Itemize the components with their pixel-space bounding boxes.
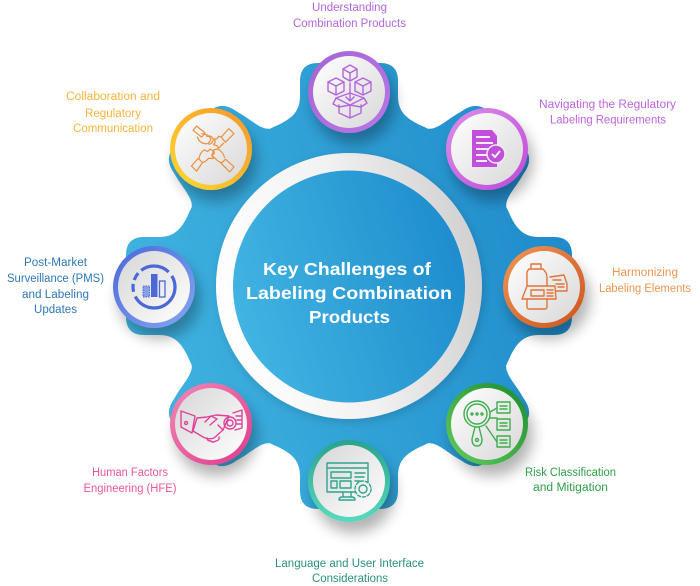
node: Post-Market Surveillance (PMS) and Labeling Updates	[113, 246, 195, 328]
label: Harmonizing Labeling Elements: Harmonizing	[612, 267, 678, 279]
node: Understanding Combination Products	[308, 51, 390, 133]
label: Risk Classification and Mitigation	[525, 467, 616, 494]
label: Language and User Interface Considerations	[275, 558, 424, 585]
icon: four hands with puzzle pieces	[191, 126, 234, 172]
icon: human and robot handshake	[181, 410, 242, 442]
node: Collaboration and Regulatory Communication	[170, 108, 252, 190]
label: Human Factors Engineering (HFE)	[84, 467, 177, 495]
icon: document with check	[472, 130, 505, 167]
label: Collaboration and Regulatory Communication: Communication	[73, 123, 153, 135]
label: Collaboration and Regulatory Communication: Collaboration and	[66, 91, 160, 103]
label: Understanding Combination Products: Combination Products	[293, 18, 406, 30]
title: Key Challenges of Labeling Combination Products: Labeling Combination	[246, 283, 452, 303]
icon: boxes	[328, 65, 371, 118]
icon: bottle and label	[522, 264, 567, 309]
label: Human Factors Engineering (HFE): Engineering (HFE)	[84, 483, 177, 495]
label: Navigating the Regulatory Labeling Requirements: Labeling Requirements	[550, 114, 666, 126]
label: Post-Market Surveillance (PMS) and Labeling Updates: Surveillance (PMS)	[7, 273, 104, 285]
label: Language and User Interface Considerations: Language and User Interface	[275, 558, 424, 570]
label: Understanding Combination Products: Understanding	[312, 2, 387, 14]
node: Navigating the Regulatory Labeling Requirements	[446, 108, 528, 190]
label: Harmonizing Labeling Elements	[599, 267, 691, 295]
blue gear background	[126, 63, 572, 509]
icon: bar chart in broken ring	[133, 266, 175, 308]
label: Collaboration and Regulatory Communication: Regulatory	[85, 108, 141, 120]
label: Harmonizing Labeling Elements: Labeling Elements	[599, 283, 691, 295]
node: Harmonizing Labeling Elements	[503, 246, 585, 328]
icon: screen and gear	[327, 463, 371, 500]
node: Human Factors Engineering (HFE)	[170, 383, 252, 465]
center white ring	[216, 153, 482, 419]
label: Risk Classification and Mitigation: and Mitigation	[533, 482, 608, 494]
label: Language and User Interface Considerations: Considerations	[312, 573, 388, 585]
label: Post-Market Surveillance (PMS) and Labeling Updates	[7, 257, 104, 316]
center blue disc	[233, 170, 465, 402]
label: Post-Market Surveillance (PMS) and Labeling Updates: Updates	[34, 304, 77, 316]
label: Navigating the Regulatory Labeling Requirements	[539, 99, 676, 126]
icon: magnifier and lists	[464, 401, 510, 447]
label: Post-Market Surveillance (PMS) and Labeling Updates: Post-Market	[24, 257, 88, 269]
center circle with title	[216, 153, 482, 419]
label: Understanding Combination Products	[293, 2, 406, 30]
label: Risk Classification and Mitigation: Risk Classification	[525, 467, 616, 479]
title: Key Challenges of Labeling Combination Products: Products	[309, 307, 390, 327]
label: Navigating the Regulatory Labeling Requirements: Navigating the Regulatory	[539, 99, 676, 111]
label: Post-Market Surveillance (PMS) and Labeling Updates: and Labeling	[22, 289, 89, 301]
title: Key Challenges of Labeling Combination Products: Key Challenges of	[263, 259, 431, 279]
node: Risk Classification and Mitigation	[446, 383, 528, 465]
title: Key Challenges of Labeling Combination Products	[246, 259, 452, 327]
label: Human Factors Engineering (HFE): Human Factors	[92, 467, 168, 479]
label: Collaboration and Regulatory Communication	[66, 91, 160, 135]
node: Language and User Interface Considerations	[308, 440, 390, 522]
